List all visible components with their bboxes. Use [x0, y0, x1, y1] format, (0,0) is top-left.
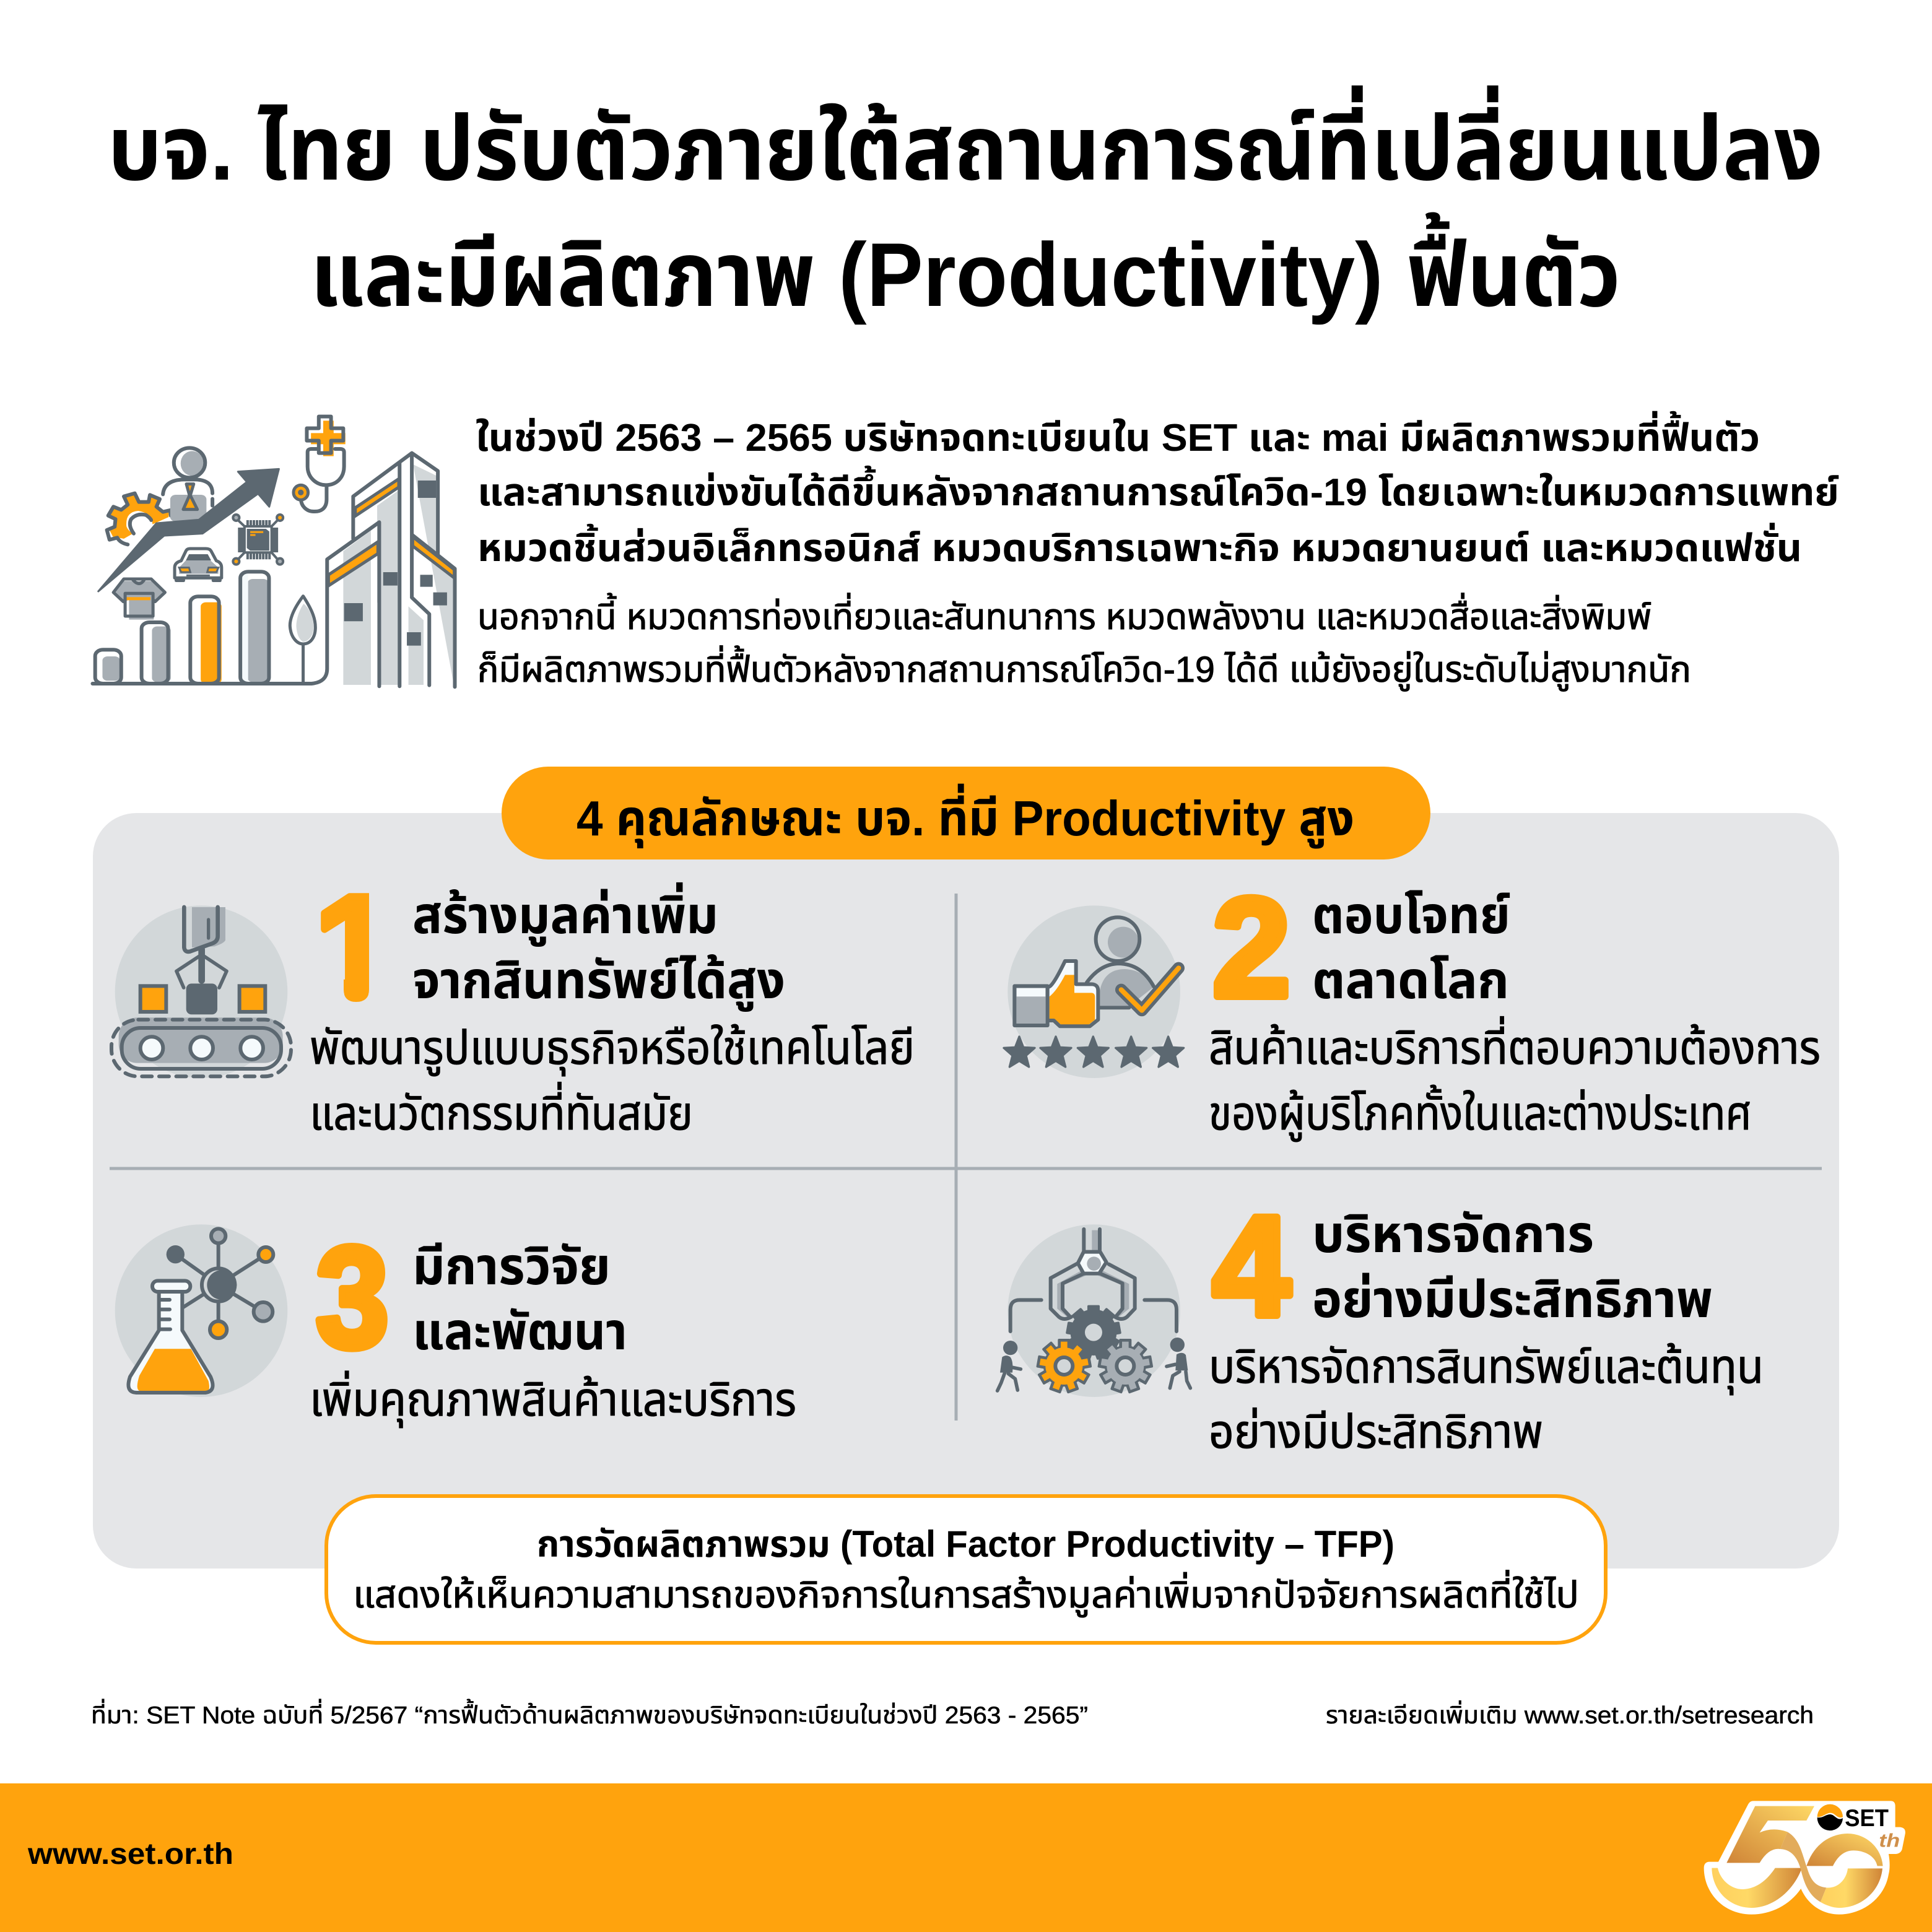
icon: gears and claw — [998, 1224, 1190, 1397]
title: บจ. ไทย ปรับตัวภายใต้สถานการณ์ที่เปลี่ยนแปลง — [108, 85, 1823, 199]
logo: SET 50th — [1704, 1801, 1905, 1915]
icon: conveyor — [111, 905, 291, 1078]
stethoscope — [294, 417, 346, 511]
number 1: 1 — [315, 866, 396, 1030]
bars — [95, 572, 269, 684]
item 1 body: และนวัตกรรมที่ทันสมัย — [310, 1082, 693, 1140]
item 3 heading: มีการวิจัย — [412, 1237, 611, 1295]
item 2 body — [1209, 1016, 1821, 1142]
item 4 body — [1209, 1341, 1764, 1458]
icon: growth illustration — [92, 417, 455, 687]
intro text: bold: และสามารถแข่งขันได้ดีขึ้นหลังจากสถานการณ์โควิด-19 โดยเฉพาะในหมวดการแพทย์ — [477, 465, 1839, 514]
callout: TFP: แสดงให้เห็นความสามารถของกิจการในการสร้างมูลค่าเพิ่มจากปัจจัยการผลิตที่ใช้ไป — [353, 1570, 1579, 1617]
footer band — [0, 1783, 1932, 1932]
icon: gear — [107, 494, 171, 544]
stars — [1004, 1037, 1184, 1067]
item 4 heading: บริหารจัดการ — [1312, 1205, 1594, 1263]
tree — [290, 596, 315, 684]
intro text: bold — [476, 411, 1839, 570]
title: และมีผลิตภาพ (Productivity) ฟื้นตัว — [310, 212, 1621, 325]
center gear — [1066, 1305, 1121, 1360]
item 1 body — [310, 1022, 915, 1140]
item 4 heading — [1312, 1205, 1713, 1328]
item 3 heading: และพัฒนา — [412, 1302, 627, 1360]
item 2 body: ของผู้บริโภคทั้งในและต่างประเทศ — [1209, 1084, 1752, 1142]
item 3 body: เพิ่มคุณภาพสินค้าและบริการ — [310, 1370, 796, 1428]
item 2 heading — [1312, 886, 1510, 1009]
buildings — [92, 453, 455, 687]
gray gear — [1097, 1339, 1153, 1394]
heading pill — [502, 767, 1430, 859]
item 3 — [115, 1217, 796, 1428]
logo: SET 50th: th — [1879, 1830, 1900, 1852]
title — [108, 85, 1823, 325]
grid dividers — [110, 894, 1822, 1421]
workers — [998, 1338, 1190, 1391]
number 2: 2 — [1212, 869, 1290, 1027]
arrow — [98, 469, 279, 591]
callout: TFP — [326, 1496, 1606, 1643]
intro text: regular: นอกจากนี้ หมวดการท่องเที่ยวและสันทนาการ หมวดพลังงาน และหมวดสื่อและสิ่งพิมพ์ — [477, 593, 1651, 637]
item 1 body: พัฒนารูปแบบธุรกิจหรือใช้เทคโนโลยี — [310, 1022, 915, 1076]
car — [175, 549, 222, 582]
item 1 — [111, 866, 915, 1140]
item 1 heading — [412, 882, 785, 1012]
item 3 heading — [412, 1237, 627, 1360]
item 2 heading: ตลาดโลก — [1312, 951, 1509, 1009]
item 4 heading: อย่างมีประสิทธิภาพ — [1312, 1270, 1713, 1328]
chip — [233, 515, 283, 565]
more info note: รายละเอียดเพิ่มเติม www.set.or.th/setresearch — [1326, 1700, 1814, 1729]
item 1 heading: จากสินทรัพย์ได้สูง — [412, 951, 785, 1012]
item 4 body: อย่างมีประสิทธิภาพ — [1209, 1406, 1543, 1458]
intro text: bold: หมวดชิ้นส่วนอิเล็กทรอนิกส์ หมวดบริการเฉพาะกิจ หมวดยานยนต์ และหมวดแฟชั่น — [477, 522, 1802, 570]
callout: TFP: การวัดผลิตภาพรวม (Total Factor Productivity – TFP) — [537, 1523, 1395, 1565]
item 4 body: บริหารจัดการสินทรัพย์และต้นทุน — [1209, 1341, 1764, 1395]
item 2 body: สินค้าและบริการที่ตอบความต้องการ — [1209, 1016, 1821, 1074]
intro text: bold: ในช่วงปี 2563 – 2565 บริษัทจดทะเบียนใน SET และ mai มีผลิตภาพรวมที่ฟื้นตัว — [476, 411, 1760, 459]
person — [163, 448, 212, 521]
intro text: regular — [477, 593, 1691, 691]
item 2 heading: ตอบโจทย์ — [1312, 886, 1510, 944]
icon: flask and molecule — [115, 1224, 287, 1397]
icon: thumbs up customer — [1004, 905, 1184, 1078]
source note: ที่มา: SET Note ฉบับที่ 5/2567 “การฟื้นตัวด้านผลิตภาพของบริษัทจดทะเบียนในช่วงปี 2563 - 2565” — [91, 1699, 1088, 1729]
orange gear — [1036, 1339, 1092, 1394]
number 4: 4 — [1212, 1186, 1290, 1346]
item 1 heading: สร้างมูลค่าเพิ่ม — [412, 882, 718, 947]
panel: characteristics — [93, 813, 1839, 1569]
item 4 — [998, 1186, 1764, 1458]
number 3: 3 — [316, 1217, 389, 1378]
website: www.set.or.th — [27, 1838, 233, 1871]
intro text: regular: ก็มีผลิตภาพรวมที่ฟื้นตัวหลังจากสถานการณ์โควิด-19 ได้ดี แม้ยังอยู่ในระดับไม่สูงมากนัก — [477, 645, 1691, 691]
heading pill: 4 คุณลักษณะ บจ. ที่มี Productivity สูง — [577, 784, 1354, 848]
shirt — [113, 579, 165, 620]
item 2 — [1004, 869, 1821, 1142]
logo: SET 50th: SET — [1845, 1804, 1889, 1832]
